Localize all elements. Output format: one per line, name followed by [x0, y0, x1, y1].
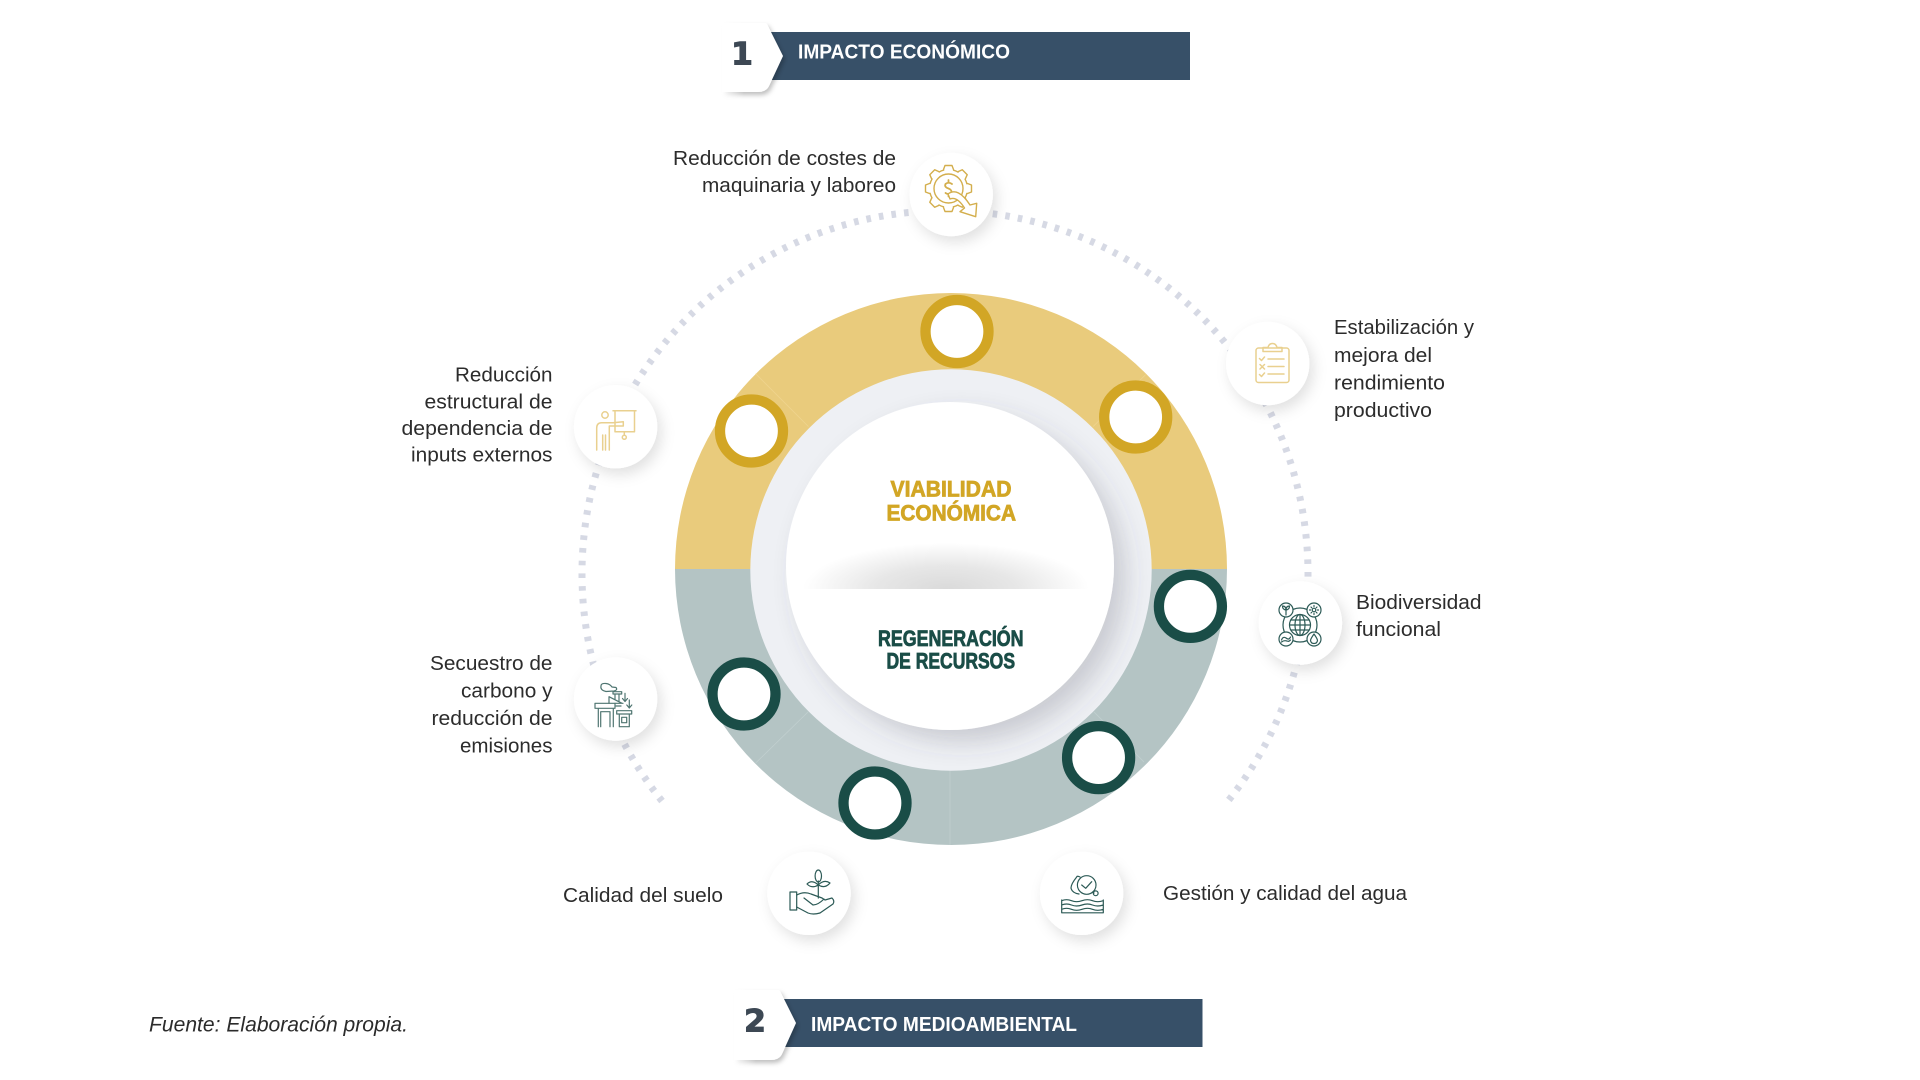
- icon: water droplet, magnifier and waves: [1040, 852, 1123, 935]
- label: emisiones: [460, 734, 552, 758]
- title: regeneración de recursos: DE RECURSOS: [886, 648, 1015, 674]
- item: biodiversidad funcional: [1259, 581, 1482, 665]
- label: Reducción: [455, 364, 552, 386]
- label: Gestión y calidad del agua: [1163, 882, 1408, 905]
- item: secuestro de carbono: [430, 652, 657, 758]
- label: Reducción de costes de: [673, 147, 896, 170]
- label: maquinaria y laboreo: [702, 174, 896, 197]
- icon: hand with sprout: [767, 852, 851, 935]
- header: impacto económico: IMPACTO ECONÓMICO: [798, 40, 1010, 64]
- item: estabilización y mejora: [1226, 316, 1475, 422]
- infographic canvas: [150, 24, 1480, 1066]
- label: Biodiversidad: [1356, 591, 1482, 614]
- label: [430, 652, 553, 758]
- title: viabilidad económica: [886, 476, 1016, 526]
- ring markers: environmental: [712, 575, 1222, 834]
- label: rendimiento: [1334, 372, 1445, 394]
- label: reducción de: [432, 707, 552, 730]
- label: [1334, 316, 1475, 422]
- segment: viabilidad económica: [675, 293, 1227, 569]
- label: productivo: [1334, 399, 1432, 422]
- label: [402, 364, 552, 466]
- label: [1356, 591, 1482, 641]
- header: impacto económico: [708, 14, 1190, 104]
- label: Secuestro de: [430, 652, 552, 675]
- item: calidad del suelo: [563, 852, 851, 935]
- label: [673, 147, 896, 197]
- label: estructural de: [424, 390, 552, 414]
- item: reducción de costes: [673, 147, 993, 236]
- source note: Fuente: Elaboración propia.: [149, 1014, 408, 1036]
- icon: globe with nature circles: [1259, 581, 1342, 665]
- label: Calidad del suelo: [563, 884, 723, 907]
- header: impacto medioambiental: IMPACTO MEDIOAMBIENTAL: [811, 1014, 1077, 1036]
- title: regeneración de recursos: [878, 626, 1024, 674]
- label: dependencia de: [402, 417, 552, 440]
- label: funcional: [1356, 618, 1441, 641]
- icon: factory with descending carbon arrows: [574, 657, 657, 741]
- icon: gear with dollar and down arrow: [910, 153, 993, 236]
- header: impacto medioambiental: 2: [744, 1004, 766, 1040]
- item: gestión y calidad del agua: [1040, 852, 1408, 935]
- ring markers: economic: [720, 300, 1167, 462]
- label: mejora del: [1334, 344, 1432, 367]
- header: impacto medioambiental: [720, 982, 1202, 1072]
- central ring chart: [675, 293, 1227, 845]
- label: Estabilización y: [1334, 316, 1475, 339]
- inner disc with shadow: [750, 369, 1152, 771]
- label: carbono y: [461, 680, 553, 702]
- icon: person at presentation board: [574, 385, 657, 468]
- title: viabilidad económica: ECONÓMICA: [886, 500, 1016, 526]
- label: inputs externos: [411, 444, 552, 466]
- icon: checklist clipboard: [1226, 322, 1309, 405]
- title: viabilidad económica: VIABILIDAD: [890, 476, 1012, 502]
- segment: regeneración de recursos: [675, 569, 1227, 845]
- title: regeneración de recursos: REGENERACIÓN: [878, 626, 1024, 651]
- header: impacto económico: 1: [731, 36, 753, 72]
- dotted orbit ring: [582, 211, 1308, 801]
- item: reducción de dependencia: [402, 364, 657, 468]
